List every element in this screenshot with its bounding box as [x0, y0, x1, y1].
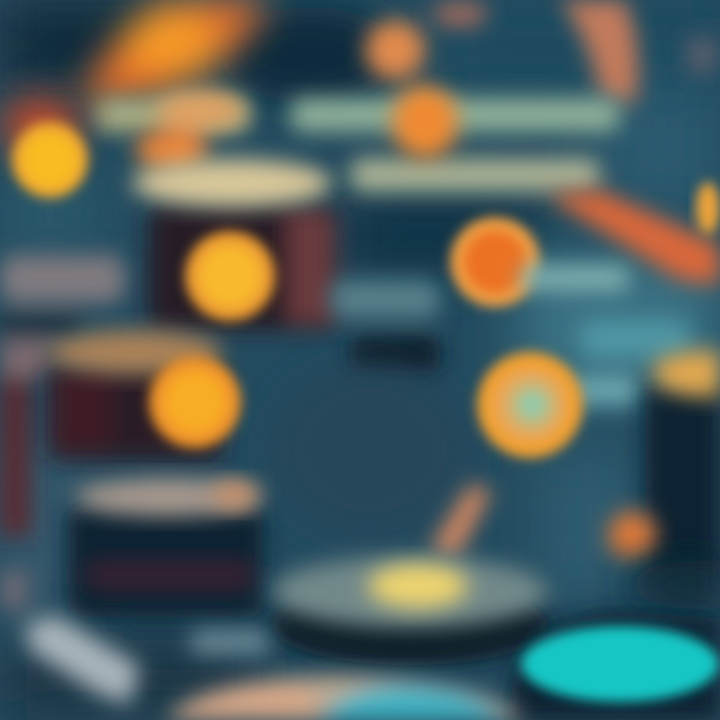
pale bands: upper rows: [95, 98, 620, 192]
pot: upper center: [132, 159, 338, 330]
dark shadow: lower right: [620, 560, 720, 610]
glowing circle: pot center: [185, 231, 275, 321]
orange diagonal bar: right: [545, 190, 720, 285]
orange blob: lower right: [608, 511, 656, 559]
salmon diagonal: top right: [560, 0, 638, 105]
glowing circle: orange right: [450, 217, 540, 307]
glowing circle: upper left: [12, 122, 88, 198]
cyan bowl: [510, 612, 720, 720]
bone shape: bottom left: [0, 570, 270, 705]
dark dome: top center: [220, 7, 400, 103]
bowl: bottom center: [165, 676, 525, 720]
glow: right edge: [696, 182, 720, 234]
dark dome: center: [270, 365, 470, 535]
pot: right edge: [645, 350, 720, 575]
glowing circle: teal center: [477, 352, 583, 458]
pale bands: left stack: [0, 255, 125, 536]
pot: lower left: [68, 478, 263, 617]
flames: over the bands: [136, 20, 458, 172]
flame: top orange: [80, 0, 270, 101]
pot: middle left: [47, 330, 223, 460]
glowing circle: middle left: [149, 356, 241, 448]
pale bands: mid right: [330, 265, 690, 405]
spatula handle: orange: [430, 485, 492, 560]
faint mauve blobs: top: [432, 1, 718, 75]
red halo: left: [0, 95, 80, 155]
pan: [270, 556, 550, 665]
